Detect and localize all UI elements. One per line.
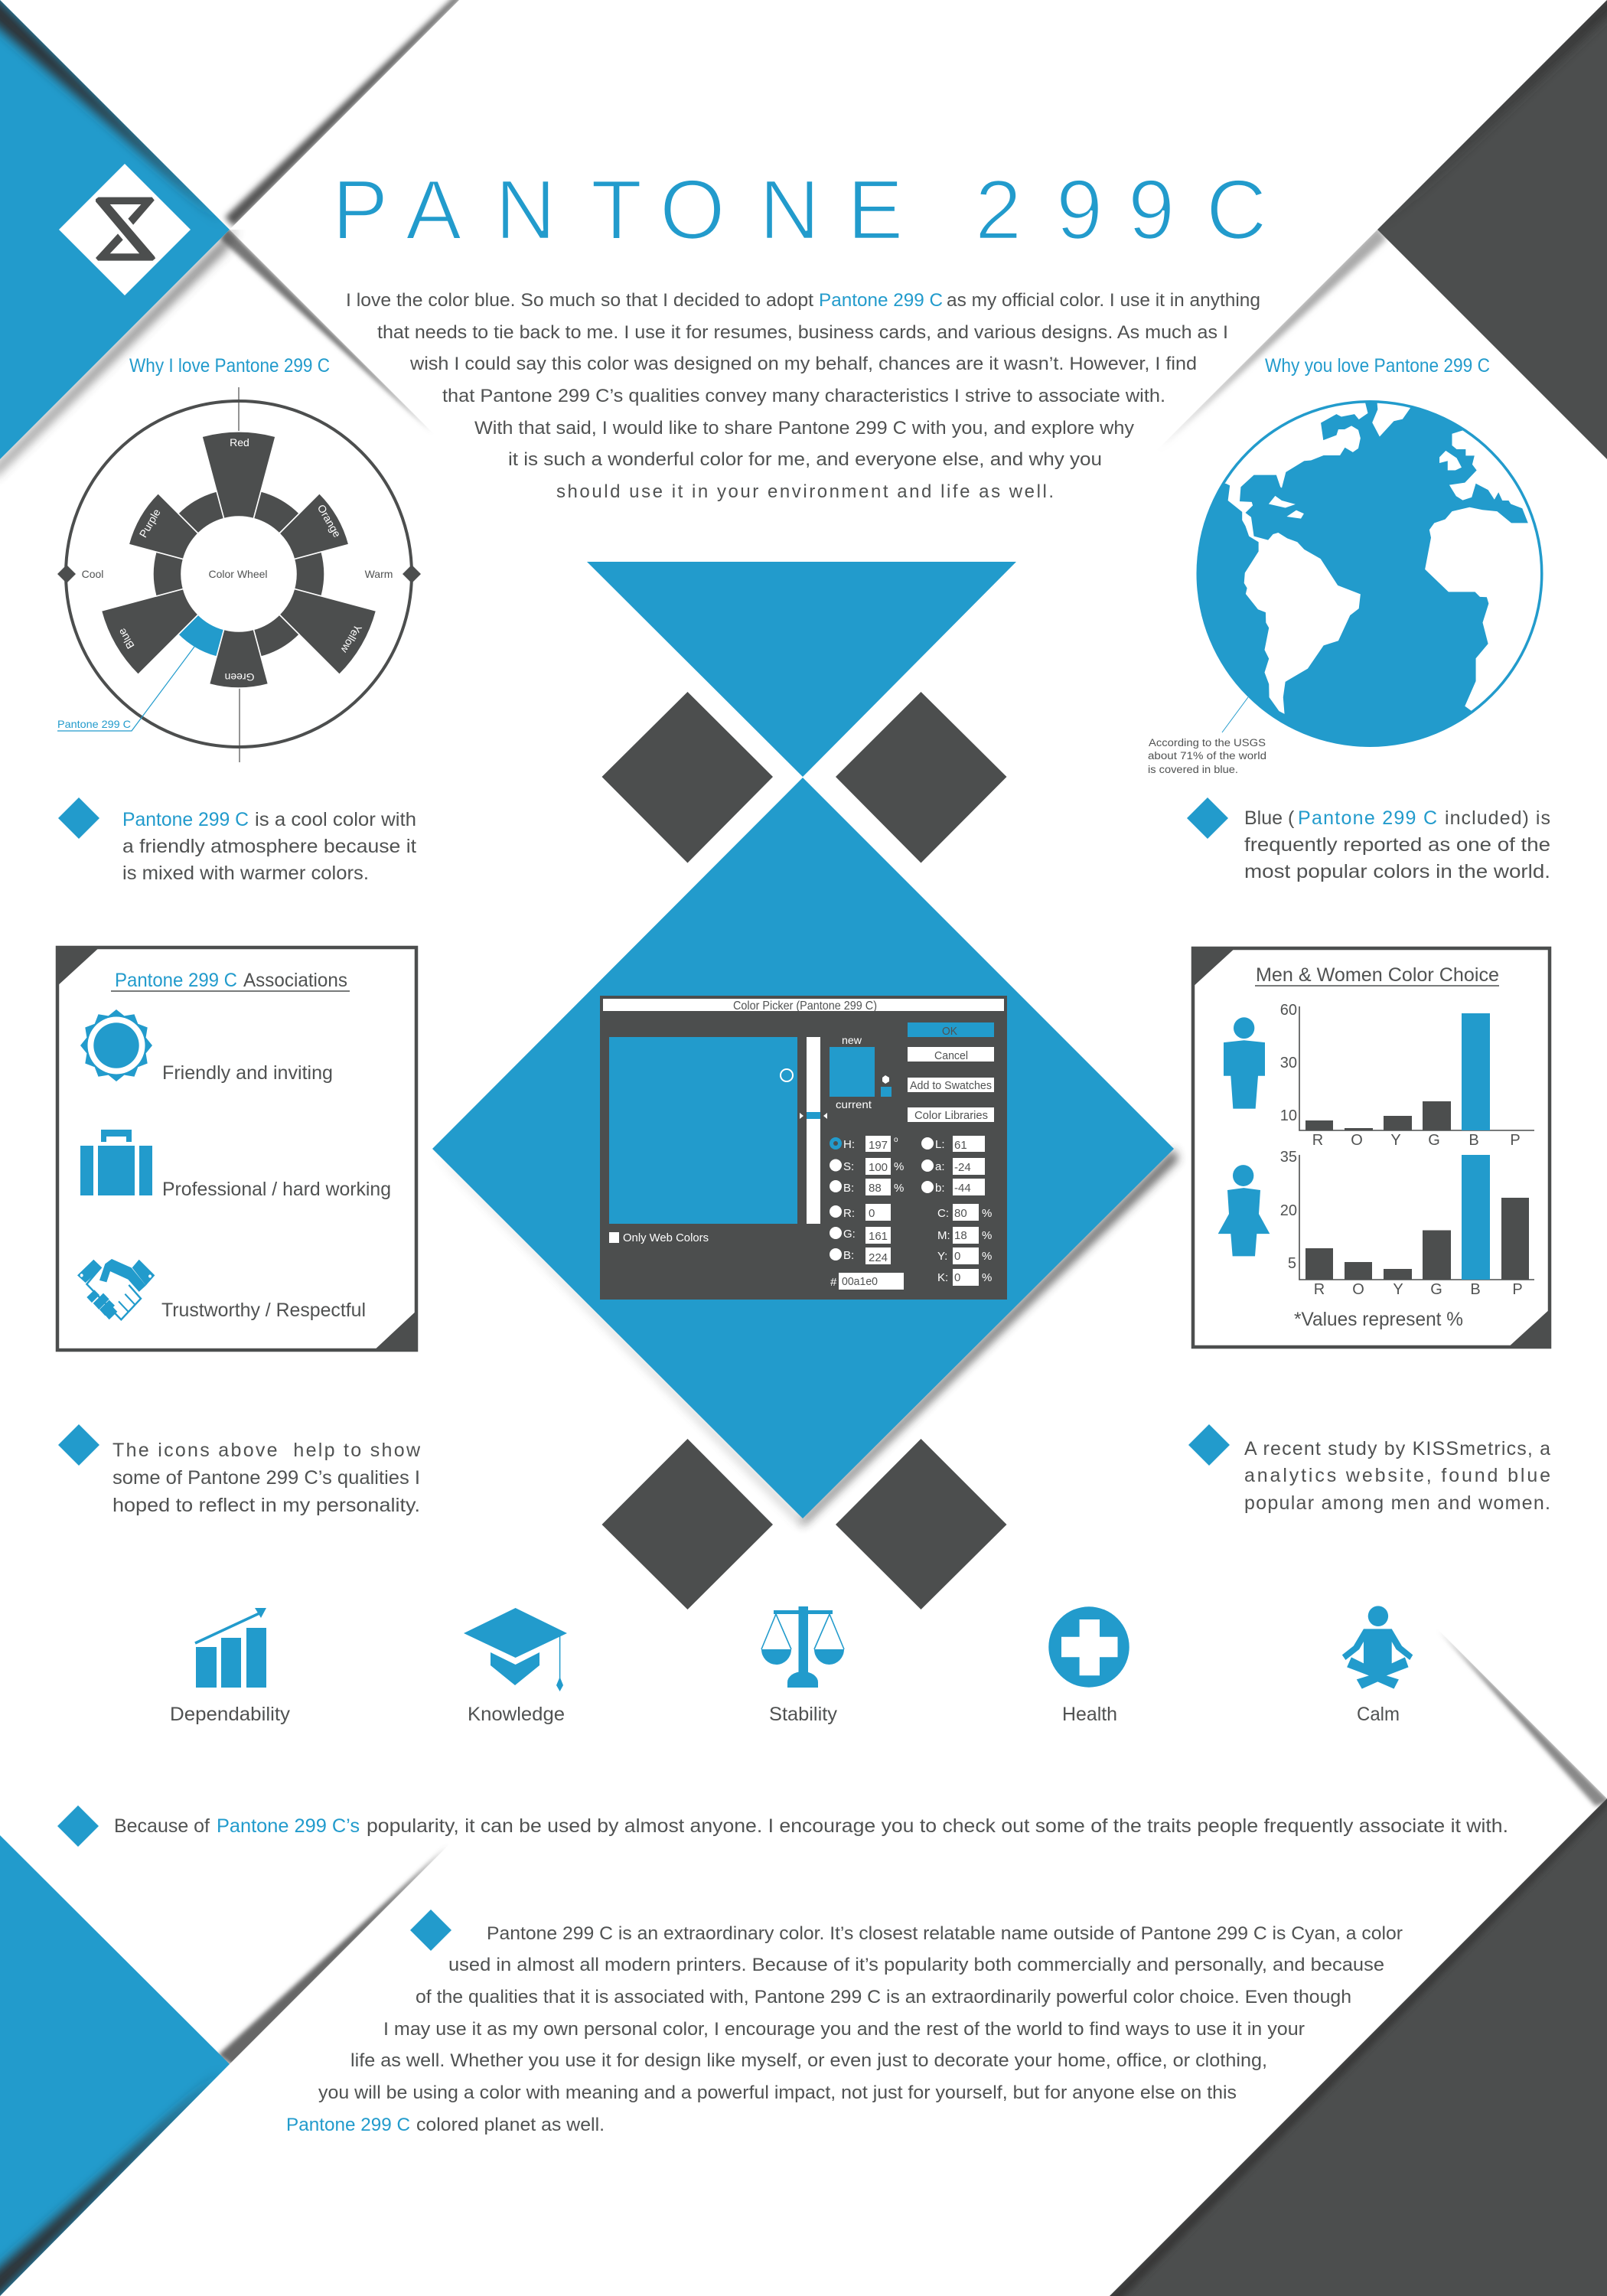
intro paragraph: it is such a wonderful color for me, and everyone else, and why you [508, 449, 1102, 470]
wheel labels: Cool [82, 568, 103, 580]
dark diamonds [601, 692, 1007, 1609]
bullet: KISSmetrics study [1188, 1424, 1550, 1514]
wheel labels [82, 436, 393, 683]
wheel labels: Purple [137, 507, 163, 540]
picker values: 100 [869, 1161, 888, 1174]
intro paragraph: that Pantone 299 C’s qualities convey many characteristics I strive to associate with. [442, 386, 1165, 406]
bullet: icons explanation: some of Pantone 299 C’s qualities I [112, 1467, 420, 1489]
picker values: -24 [954, 1161, 971, 1174]
bullet: KISSmetrics study: A recent study by KISSmetrics, a [1244, 1438, 1550, 1459]
picker title bar: Color Picker (Pantone 299 C) [733, 1000, 877, 1013]
intro paragraph: as my official color. I use it in anything [947, 290, 1260, 311]
bullet: popular color: frequently reported as one of the [1244, 834, 1550, 856]
color wheel chart [57, 387, 421, 762]
bar chart: men: Y [1390, 1132, 1401, 1149]
bullet: popularity sentence: popularity, it can be used by almost anyone. I encourage you to check out some of the traits people frequently associate it with. [367, 1815, 1508, 1837]
picker field labels: # [830, 1276, 837, 1289]
picker values: 224 [869, 1251, 888, 1264]
wheel labels: Blue [116, 626, 137, 651]
globe leader line [1222, 697, 1248, 732]
picker field labels: o [894, 1136, 898, 1144]
closing paragraph: colored planet as well. [416, 2115, 605, 2135]
globe note: According to the USGS [1149, 737, 1266, 748]
picker field labels: H: [843, 1138, 855, 1151]
trait: health: Health [1062, 1704, 1117, 1725]
bullet: cool color: is a cool color with [255, 809, 416, 830]
bar chart: men: B [1468, 1132, 1479, 1149]
bullet: popularity sentence: Because of [114, 1815, 210, 1837]
bar chart: women [1280, 1149, 1534, 1298]
bullet: popularity sentence [57, 1805, 1508, 1847]
picker buttons: Cancel [934, 1049, 968, 1062]
chart footnote: *Values represent % [1294, 1309, 1463, 1330]
panel: associations [56, 946, 418, 1352]
closing paragraph: life as well. Whether you use it for design like myself, or even just to decorate your home, office, or clothing, [350, 2050, 1267, 2071]
intro paragraph [346, 290, 1260, 502]
closing paragraph: you will be using a color with meaning and a powerful impact, not just for yourself, but for anyone else on this [318, 2082, 1237, 2103]
picker values [842, 1139, 971, 1288]
bullet: popular color: most popular colors in the world. [1244, 861, 1550, 882]
picker field labels: % [982, 1207, 992, 1220]
picker field labels: Y: [937, 1250, 947, 1263]
background corner: top-left blue triangle with fold shadows [0, 0, 464, 478]
background corner: bottom-right dark triangle [1102, 1630, 1607, 2296]
icon: woman [1218, 1165, 1270, 1256]
picker values: 88 [869, 1182, 882, 1195]
wheel labels: Green [225, 671, 254, 683]
wheel labels: Color Wheel [208, 568, 268, 580]
picker field labels: C: [937, 1207, 949, 1220]
icon: handshake [77, 1259, 155, 1319]
callout: Pantone 299 C on wheel: Pantone 299 C [57, 718, 131, 730]
picker field labels: Only Web Colors [623, 1231, 709, 1244]
bar chart: women: P [1512, 1281, 1523, 1298]
panel: men and women color choice [1191, 947, 1551, 1349]
picker color field [609, 1037, 797, 1224]
title: PANTONE299C [332, 163, 1266, 257]
bar chart: women: R [1314, 1281, 1325, 1298]
picker field labels: K: [937, 1271, 948, 1284]
intro paragraph: should use it in your environment and life as well. [556, 481, 1054, 502]
wheel labels: Warm [365, 568, 393, 580]
logo: white diamond with hourglass sigma [59, 164, 191, 295]
picker values: 18 [954, 1229, 967, 1242]
picker values: 00a1e0 [842, 1275, 878, 1288]
trait: dependability: Dependability [170, 1704, 291, 1725]
picker field labels: B: [843, 1182, 854, 1195]
picker swatches: current [836, 1098, 872, 1110]
central top triangle [587, 562, 1016, 777]
picker values: 0 [954, 1271, 960, 1284]
picker field labels: % [894, 1182, 904, 1195]
trait: calm: Calm [1357, 1704, 1400, 1725]
color picker dialog [600, 996, 1007, 1300]
icon: graduation cap [464, 1608, 567, 1691]
picker input boxes [609, 1136, 985, 1290]
bar chart: men: R [1312, 1132, 1323, 1149]
bullet: icons explanation: hoped to reflect in my personality. [112, 1495, 420, 1516]
trait: stability [761, 1606, 844, 1725]
picker field labels: M: [937, 1229, 950, 1242]
bar chart: women: 5 [1288, 1255, 1296, 1272]
intro paragraph: wish I could say this color was designed on my behalf, chances are it wasn’t. However, I find [409, 354, 1197, 374]
picker field labels: S: [843, 1160, 854, 1173]
heading: why I love: Why I love Pantone 299 C [129, 355, 330, 377]
bullet: popular color: Blue ( [1244, 807, 1295, 829]
picker values: 197 [869, 1139, 888, 1152]
wheel labels: Yellow [338, 622, 364, 656]
picker values: 161 [869, 1230, 888, 1243]
picker values: 61 [954, 1139, 967, 1152]
bar chart: men: 60 [1280, 1002, 1297, 1019]
wheel labels: Red [230, 436, 249, 448]
icon: man [1224, 1017, 1265, 1109]
picker values: 0 [869, 1207, 875, 1220]
picker radios [830, 1137, 934, 1261]
bullet: cool color: is mixed with warmer colors. [122, 863, 369, 884]
icon: scales [761, 1606, 844, 1688]
bar chart: men: G [1428, 1132, 1440, 1149]
callout: Pantone 299 C on wheel [57, 647, 194, 731]
label: trustworthy: Trustworthy / Respectful [161, 1300, 366, 1321]
label: friendly: Friendly and inviting [162, 1062, 333, 1084]
closing paragraph: Pantone 299 C is an extraordinary color. It’s closest relatable name outside of Pantone 299 C is Cyan, a color [487, 1923, 1403, 1944]
closing paragraph: used in almost all modern printers. Because of it’s popularity both commercially and personally, and because [448, 1955, 1384, 1975]
central diamond with shadow [432, 778, 1178, 1528]
globe note: about 71% of the world [1148, 750, 1266, 762]
bullet: cool color: Pantone 299 C [122, 809, 249, 830]
closing paragraph: I may use it as my own personal color, I encourage you and the rest of the world to find ways to use it in your [383, 2019, 1305, 2040]
picker field labels: B: [843, 1249, 854, 1262]
picker field labels: % [982, 1229, 992, 1242]
bar chart: men: 10 [1280, 1107, 1297, 1124]
closing paragraph [286, 1910, 1403, 2135]
associations heading [111, 970, 350, 991]
intro paragraph: With that said, I would like to share Pantone 299 C with you, and explore why [474, 418, 1134, 439]
picker field labels: % [894, 1160, 904, 1173]
icon: meditating figure [1342, 1606, 1413, 1689]
bullet: icons explanation: The icons above help to show [112, 1440, 421, 1461]
label: professional: Professional / hard working [162, 1179, 391, 1200]
bar chart: men [1280, 1002, 1534, 1149]
picker values: 80 [954, 1207, 967, 1220]
picker field labels: L: [935, 1138, 945, 1151]
trait: knowledge [464, 1608, 567, 1725]
bar chart: men: 30 [1280, 1055, 1297, 1071]
trait: health [1048, 1606, 1129, 1725]
icon: sun [80, 1009, 152, 1081]
bar chart: women: 35 [1280, 1149, 1297, 1166]
wheel labels: Orange [315, 502, 344, 540]
globe note: is covered in blue. [1148, 764, 1238, 775]
bar chart: women: 20 [1280, 1202, 1297, 1219]
bullet: cool color: a friendly atmosphere because it [122, 836, 416, 857]
picker buttons: Color Libraries [914, 1109, 988, 1122]
picker buttons [908, 1022, 994, 1122]
bullet: popularity sentence: Pantone 299 C’s [217, 1815, 360, 1837]
bar chart: women: G [1430, 1281, 1442, 1298]
intro paragraph: that needs to tie back to me. I use it for resumes, business cards, and various designs. As much as I [377, 322, 1228, 343]
bar chart: women: Y [1393, 1281, 1403, 1298]
globe note [1148, 737, 1266, 775]
closing paragraph: Pantone 299 C [286, 2115, 410, 2135]
bullet: popular color: included) is [1445, 807, 1550, 829]
bar chart: men: O [1351, 1132, 1363, 1149]
intro paragraph: Pantone 299 C [819, 290, 943, 311]
heading: why you love: Why you love Pantone 299 C [1265, 355, 1490, 377]
background corner: top-right dark triangle [1159, 0, 1607, 459]
picker buttons: Add to Swatches [910, 1079, 992, 1092]
bullet: KISSmetrics study: popular among men and women. [1244, 1492, 1550, 1514]
chart heading: Men & Women Color Choice [1256, 964, 1499, 986]
picker values: -44 [954, 1182, 971, 1195]
bullet: popular color [1187, 797, 1550, 882]
picker values: 0 [954, 1250, 960, 1263]
bullet: icons explanation [58, 1424, 421, 1516]
picker hue slider [800, 1037, 827, 1224]
picker field labels: % [982, 1250, 992, 1263]
picker field labels: R: [843, 1207, 855, 1220]
picker field labels: a: [935, 1160, 945, 1173]
picker field labels: % [982, 1271, 992, 1284]
trait: knowledge: Knowledge [468, 1704, 565, 1725]
bullet: cool color [58, 797, 416, 884]
picker field labels [623, 1136, 992, 1289]
icon: medical cross [1048, 1606, 1129, 1688]
background corner: bottom-left blue triangle [0, 1835, 448, 2296]
trait: stability: Stability [769, 1704, 837, 1725]
picker title bar [603, 999, 1004, 1013]
bullet: popular color: Pantone 299 C [1298, 807, 1437, 829]
bar chart: women: B [1470, 1281, 1481, 1298]
wheel sectors [101, 432, 376, 688]
associations heading: Associations [243, 970, 347, 991]
bar chart: men: P [1510, 1132, 1521, 1149]
picker buttons: OK [942, 1025, 957, 1038]
bar chart: women: O [1352, 1281, 1364, 1298]
picker field labels: b: [935, 1182, 945, 1195]
intro paragraph: I love the color blue. So much so that I decided to adopt [346, 290, 813, 311]
bullet: KISSmetrics study: analytics website, found blue [1244, 1465, 1550, 1486]
icon: briefcase [80, 1130, 152, 1195]
trait: calm [1342, 1606, 1413, 1725]
picker swatches: new [842, 1034, 862, 1046]
icon: rising bars [195, 1608, 266, 1688]
picker field labels: G: [843, 1228, 856, 1241]
picker swatches [830, 1034, 892, 1110]
globe illustration [1148, 400, 1543, 773]
associations heading: Pantone 299 C [115, 970, 237, 991]
closing paragraph: of the qualities that it is associated with, Pantone 299 C is an extraordinarily powerful color choice. Even though [416, 1987, 1351, 2007]
trait: dependability [170, 1608, 291, 1725]
